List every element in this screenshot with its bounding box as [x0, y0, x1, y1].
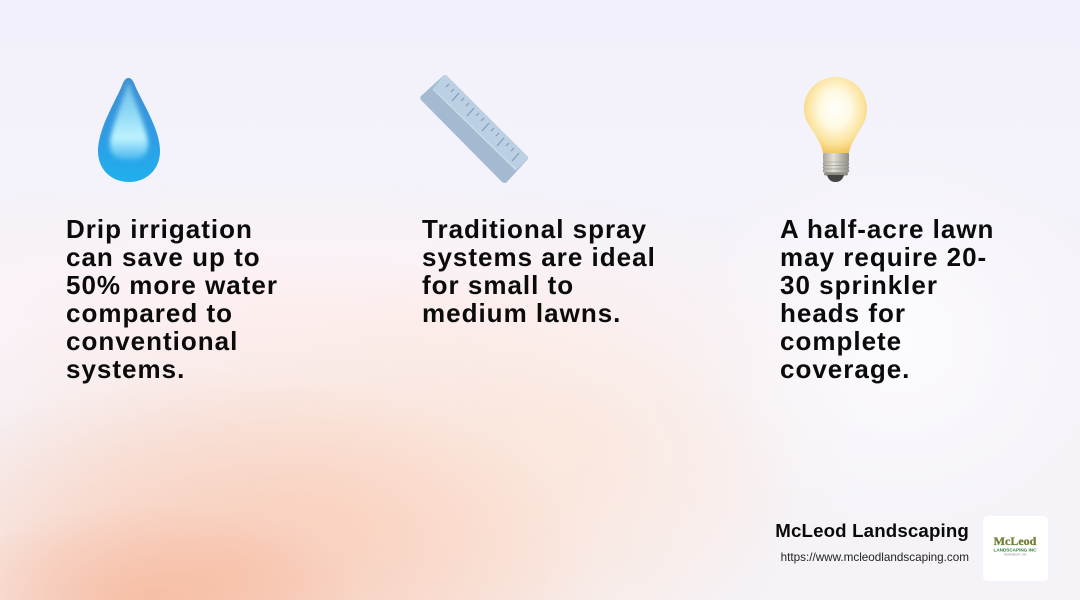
text block: drip irrigation: conventional	[66, 326, 238, 356]
text block: drip irrigation	[66, 214, 278, 384]
text block: drip irrigation: compared to	[66, 298, 233, 328]
icon: ruler	[420, 75, 528, 183]
text block: spray systems: medium lawns.	[422, 298, 621, 328]
text block: drip irrigation: systems.	[66, 354, 185, 384]
text block: drip irrigation: Drip irrigation	[66, 214, 253, 244]
icon: light bulb	[804, 77, 867, 182]
text block: drip irrigation: can save up to	[66, 242, 261, 272]
logo: McLeod Landscaping: McLeod	[994, 534, 1037, 548]
icon: water drop	[98, 78, 160, 182]
text block: spray systems: systems are ideal	[422, 242, 656, 272]
text block: half-acre lawn: 30 sprinkler	[780, 270, 938, 300]
website url: https://www.mcleodlandscaping.com	[781, 551, 969, 564]
brand name and url	[775, 520, 969, 564]
text block: spray systems: for small to	[422, 270, 574, 300]
text block: half-acre lawn: complete	[780, 326, 902, 356]
text block: spray systems	[422, 214, 656, 328]
brand name: McLeod Landscaping	[775, 520, 969, 541]
text block: half-acre lawn	[780, 214, 994, 384]
text block: spray systems: Traditional spray	[422, 214, 647, 244]
text block: half-acre lawn: coverage.	[780, 354, 910, 384]
text block: drip irrigation: 50% more water	[66, 270, 278, 300]
logo: McLeod Landscaping: LANDSCAPING INC	[994, 548, 1037, 552]
text block: half-acre lawn: A half-acre lawn	[780, 214, 994, 244]
text block: half-acre lawn: may require 20-	[780, 242, 987, 272]
logo: McLeod Landscaping: TEWKSBURY, MA	[1003, 552, 1027, 556]
logo: McLeod Landscaping	[983, 516, 1048, 581]
text block: half-acre lawn: heads for	[780, 298, 906, 328]
